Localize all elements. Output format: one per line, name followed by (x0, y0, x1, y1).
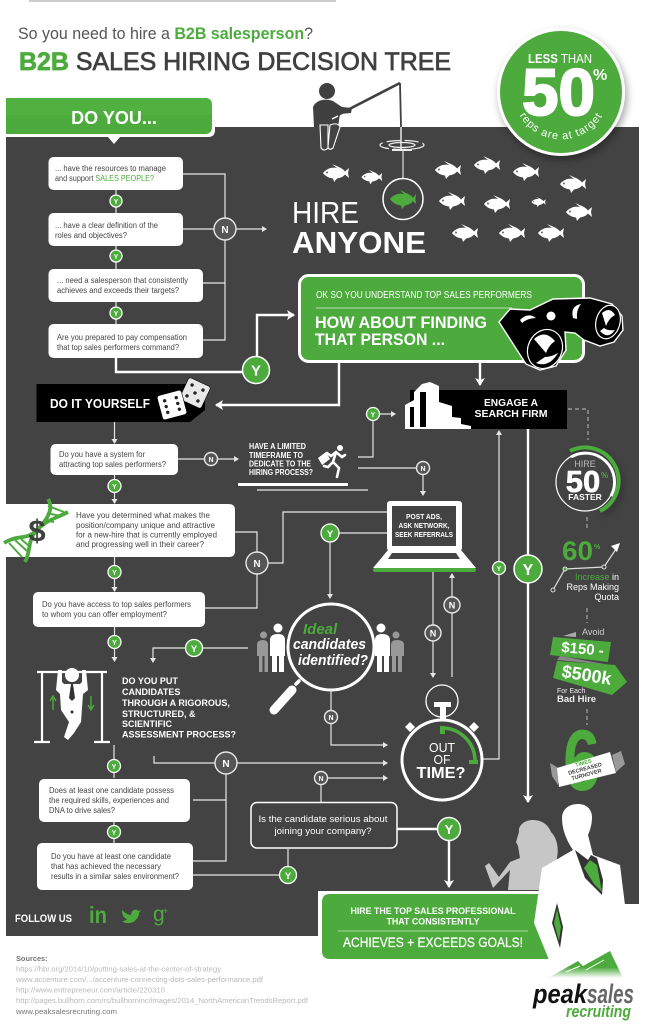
yes connector to finding panel: Y (251, 362, 261, 380)
icon: businessman silhouette (534, 804, 625, 960)
icon: laptop post ads (373, 501, 476, 572)
icon: stopwatch out of time: OUT (429, 740, 455, 755)
stat: hire 50% faster: 50 (566, 464, 600, 499)
stat: 60% increase: Quota (594, 592, 619, 602)
question: attracting system (50, 444, 178, 475)
panel: how about finding that person: HOW ABOUT FINDING (315, 314, 487, 332)
stat: avoid bad hire: Bad Hire (557, 694, 596, 705)
dashed connector (586, 709, 588, 725)
sources (15, 954, 309, 1016)
connector: yes ideal candidates: Y (327, 529, 334, 540)
sources: http://pages.bullhorn.com/rs/bullhorninc/images/2014_NorthAmericanTrendsReport.pdf (16, 996, 309, 1005)
question 4: that top sales performers command? (57, 343, 180, 352)
connector: yes to search firm: Y (371, 412, 376, 419)
connector: system question (114, 422, 238, 503)
question 4: Are you prepared to pay compensation (57, 333, 187, 342)
question: access to top performers (33, 592, 205, 627)
follow us: g (153, 903, 165, 926)
small yes badges column three: Y (112, 764, 117, 771)
question: unique position: position/company unique and attractive (76, 521, 216, 530)
connector column two (114, 557, 116, 591)
rigorous assessment text (122, 676, 236, 740)
connector: yes ideal candidates (321, 524, 387, 598)
icon: laptop post ads: POST ADS, (406, 512, 442, 521)
rigorous assessment text: STRUCTURED, & (122, 709, 196, 719)
connector: no to post ads (358, 462, 430, 495)
connector: ideal no to out of time (324, 690, 387, 745)
icon: running man (318, 445, 345, 477)
question: required skills: Does at least one candidate possess (49, 786, 174, 795)
small yes badges column two: Y (112, 484, 117, 491)
icon: dice (157, 377, 211, 420)
question 2: roles and objectives? (55, 231, 128, 240)
fish school (323, 156, 592, 242)
icon: stopwatch out of time (402, 685, 482, 800)
panel: do you header (0, 98, 215, 144)
timeframe bars (238, 483, 368, 491)
icon: magnifier ideal candidates: Ideal (303, 621, 338, 638)
question 3: ... need a salesperson that consistently (57, 276, 188, 285)
rigorous assessment text: DO YOU PUT (122, 676, 178, 686)
connector: out of time up to laptop (444, 574, 460, 677)
connector: assessment no branch (154, 752, 387, 861)
panel: how about finding that person: OK SO YOU UNDERSTAND TOP SALES PERFORMERS (316, 290, 532, 301)
stat: avoid bad hire (550, 627, 627, 705)
main yes line: Y (523, 562, 534, 579)
logo: peak sales recruiting: peak (532, 979, 589, 1009)
icon: laptop post ads: SEEK REFERRALS (395, 530, 453, 539)
panel: hire top sales professional: ACHIEVES + EXCEEDS GOALS! (343, 935, 523, 950)
stat: hire 50% faster: FASTER (568, 492, 602, 502)
connector column three (113, 745, 115, 778)
stat: six times decreased turnover: DECREASED (568, 762, 603, 777)
small yes badges column one (110, 195, 122, 319)
small yes badges column one: Y (114, 254, 119, 261)
logo: peak sales recruiting (532, 951, 634, 1021)
stat: six times decreased turnover (550, 713, 625, 809)
question: attracting system: Do you have a system for (59, 450, 145, 459)
limited timeframe text: HAVE A LIMITED (249, 442, 306, 451)
small yes badges column two: Y (112, 570, 117, 577)
limited timeframe text (249, 442, 313, 477)
dashed connector (568, 409, 588, 440)
question: candidate serious (251, 802, 397, 848)
connector: serious yes: Y (445, 822, 454, 837)
connector: yes to search firm (358, 408, 395, 457)
green fish in circle (383, 178, 423, 220)
small yes badges column two (108, 480, 121, 648)
question: achieved results: that has achieved the necessary (51, 862, 161, 871)
question: unique position (0, 504, 235, 557)
limited timeframe text: HIRING PROCESS? (249, 468, 313, 477)
icon: stopwatch out of time: TIME? (416, 765, 466, 782)
question 1: ... have the resources to manage (55, 164, 167, 173)
small yes badges column three (108, 760, 120, 838)
follow us: FOLLOW US (15, 913, 72, 925)
question: candidate serious: Is the candidate serious about (258, 814, 388, 824)
hire anyone (292, 195, 426, 260)
ripples (380, 140, 424, 150)
stat: 60% increase: Reps Making (566, 582, 619, 592)
connector: ideal yes to assessment (153, 640, 248, 662)
icon: stopwatch out of time: OF (434, 752, 451, 767)
connector: no branch to post ads: N (253, 559, 261, 570)
stat: avoid bad hire: For Each (557, 688, 586, 695)
panel: hire top sales professional (318, 891, 550, 959)
connector: serious yes (397, 818, 460, 887)
stat: avoid bad hire: Avoid (582, 627, 604, 637)
sources: Sources: (16, 954, 48, 963)
title: B2B SALES HIRING DECISION TREE (19, 48, 451, 76)
connector below access question (114, 627, 116, 661)
question 2 (48, 213, 183, 246)
question 1: and support SALES PEOPLE? (55, 174, 154, 183)
stat: 60% increase: % (594, 544, 601, 551)
sources: www.peaksalesrecruting.com (15, 1007, 117, 1016)
connector column three lower (113, 822, 115, 843)
question 1 (48, 157, 183, 190)
main yes line (514, 429, 542, 802)
connector: ideal no to out of time: N (328, 715, 334, 722)
question 4 (48, 324, 203, 358)
question 3 (48, 269, 203, 302)
limited timeframe text: DEDICATE TO THE (249, 460, 312, 468)
engage a search firm: SEARCH FIRM (474, 408, 548, 420)
question: required skills: the required skills, experiences and (49, 796, 169, 805)
connector: no branch to post ads (205, 512, 387, 608)
engage a search firm (405, 382, 567, 429)
badge: less than 50%: LESS THAN (528, 52, 592, 66)
question: candidate serious: joining your company? (273, 826, 372, 836)
panel: do you header: DO YOU... (71, 108, 157, 128)
question: achieved results: Do you have at least one candidate (51, 852, 172, 861)
follow us: in (89, 902, 107, 928)
icon: dna dollar: $ (28, 513, 46, 548)
connector: yes to serious question: Y (285, 871, 292, 882)
small yes badges column two: Y (112, 640, 117, 647)
small yes badges column one: Y (114, 311, 119, 318)
out of time yes line (483, 431, 506, 759)
panel: how about finding that person (300, 276, 584, 362)
logo: peak sales recruiting: recruiting (566, 1002, 632, 1021)
connector: no to post ads: N (420, 466, 426, 473)
question: achieved results (37, 843, 193, 890)
dashed connector (586, 517, 588, 531)
hire anyone: HIRE (292, 195, 359, 230)
follow us (15, 902, 168, 928)
connector: yes to serious question (193, 849, 296, 884)
icon: pull-up figure (34, 668, 110, 742)
rigorous assessment text: ASSESSMENT PROCESS? (122, 730, 236, 740)
icon: magnifier ideal candidates: identified? (298, 653, 368, 669)
do it yourself banner (36, 384, 205, 422)
no badge: hire anyone branch (214, 218, 236, 240)
connector: out of time up to laptop: N (449, 600, 455, 610)
sources: https://hbr.org/2014/10/putting-sales-at-the-center-of-strategy (16, 964, 221, 974)
badge: less than 50%: % (593, 67, 607, 84)
connector: ideal yes to assessment: Y (191, 644, 198, 655)
follow us: + (163, 906, 168, 916)
small yes badges column three: Y (112, 830, 117, 837)
stat: avoid bad hire: $150 - (561, 639, 605, 660)
stat: 60% increase (551, 536, 620, 602)
stat: 60% increase: 60 (562, 536, 593, 566)
dashed connector (586, 608, 588, 623)
rigorous assessment text: CANDIDATES (122, 687, 180, 697)
stat: hire 50% faster: % (601, 471, 608, 480)
stat: six times decreased turnover: TURNOVER (571, 768, 602, 782)
icon: dna dollar (4, 499, 68, 562)
limited timeframe text: TIMEFRAME TO (249, 451, 303, 460)
connector: assessment no branch: N (222, 759, 230, 770)
stat: 60% increase: Increase in (575, 572, 619, 582)
out of time yes line: Y (497, 566, 502, 573)
question: unique position: and progressing well in their career? (76, 540, 205, 549)
icon: laptop post ads: ASK NETWORK, (398, 521, 450, 530)
sources: www.accenture.com/.../accenture-connecting-dots-sales-performance.pdf (15, 975, 264, 984)
connector: serious no (314, 772, 387, 802)
stat: avoid bad hire: $500k (560, 661, 614, 689)
panel: how about finding that person: THAT PERSON ... (315, 331, 445, 349)
no badge: hire anyone branch: N (221, 225, 229, 236)
sources: http://www.entrepreneur.com/article/220310 (16, 986, 165, 994)
hire anyone: ANYONE (292, 225, 426, 260)
subtitle: So you need to hire a B2B salesperson? (18, 24, 313, 43)
dark panel (6, 127, 639, 936)
connector: laptop down to out of time (425, 572, 441, 677)
arrow to search firm (479, 362, 481, 385)
panel: hire top sales professional: THAT CONSISTENTLY (386, 916, 480, 926)
question: access to top performers: Do you have access to top sales performers (42, 600, 191, 609)
engage a search firm: ENGAGE A (484, 397, 538, 409)
question 2: ... have a clear definition of the (55, 221, 159, 230)
connector: serious no: N (318, 776, 324, 783)
stat: six times decreased turnover: 6 (563, 713, 600, 809)
badge: less than 50%: 50 (522, 55, 595, 129)
connector: laptop down to out of time: N (430, 628, 436, 638)
question: unique position: for a new-hire that is currently employed (76, 530, 217, 540)
no badge: N (208, 457, 214, 464)
question 3: achieves and exceeds their targets? (57, 286, 180, 295)
stat: six times decreased turnover: TIMES (575, 759, 593, 769)
rigorous assessment text: SCIENTIFIC (122, 719, 173, 729)
yes connector to finding panel (116, 315, 294, 384)
icon: magnifier ideal candidates: candidates (293, 637, 366, 653)
badge: less than 50%: reps are at target (520, 112, 602, 140)
connectors: first question group (116, 174, 266, 340)
question: required skills (39, 779, 190, 822)
icon: magnifier ideal candidates (257, 604, 404, 710)
icon: woman silhouette (485, 820, 558, 890)
small yes badges column one: Y (114, 199, 119, 206)
do it yourself banner: DO IT YOURSELF (50, 397, 150, 411)
fisherman (313, 83, 401, 150)
panel: hire top sales professional: HIRE THE TOP SALES PROFESSIONAL (350, 906, 516, 916)
arrow to do it yourself (216, 362, 339, 405)
question: required skills: DNA to drive sales? (49, 806, 116, 815)
hook line (402, 150, 404, 179)
question: unique position: Have you determined what makes the (76, 511, 211, 520)
no badge (204, 452, 218, 466)
icon: binoculars (499, 298, 624, 374)
top grey bar (29, 0, 336, 2)
stat: hire 50% faster: HIRE (574, 459, 596, 469)
question: access to top performers: to whom you can offer employment? (42, 610, 168, 619)
stat: hire 50% faster (556, 447, 619, 511)
question: attracting system: attracting top sales performers? (59, 460, 167, 469)
rigorous assessment text: THROUGH A RIGOROUS, (122, 698, 230, 708)
badge: less than 50% (494, 27, 632, 161)
question: achieved results: results in a similar sales environment? (51, 872, 180, 881)
